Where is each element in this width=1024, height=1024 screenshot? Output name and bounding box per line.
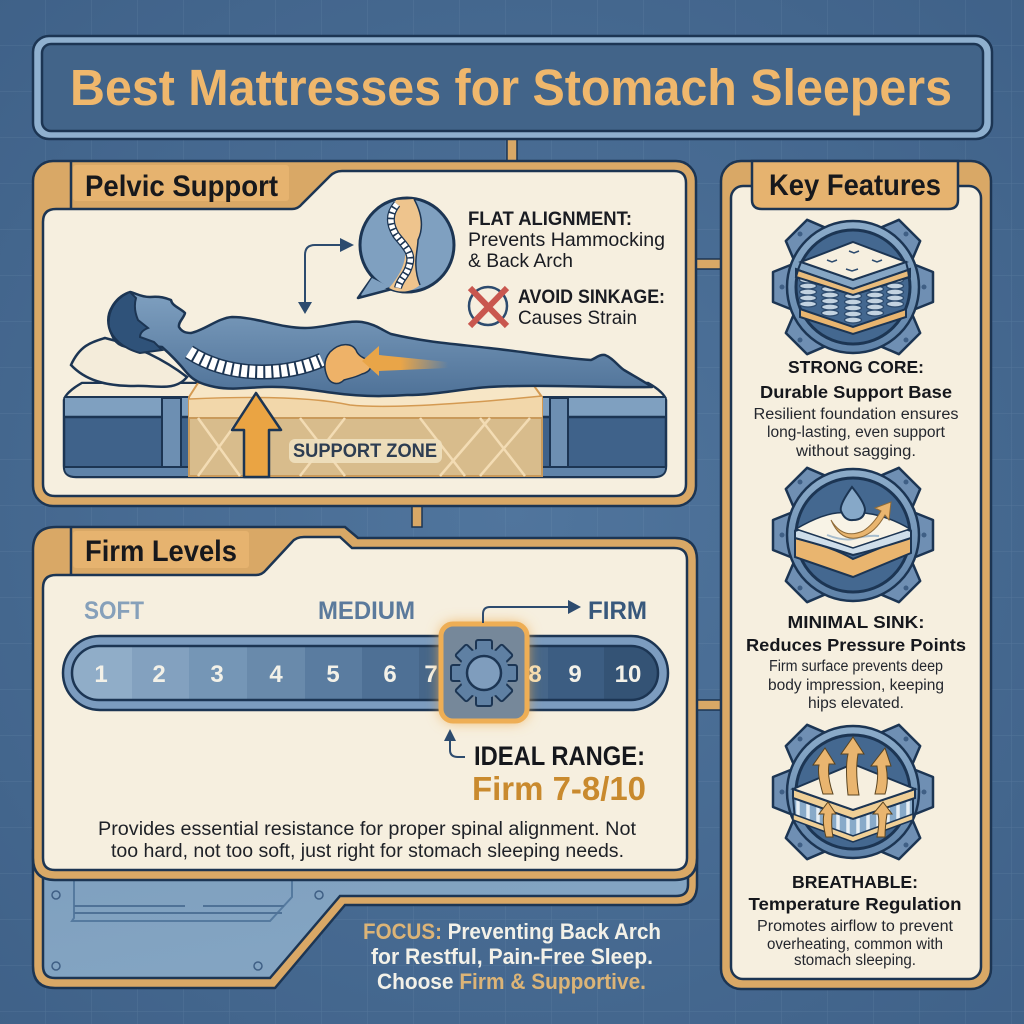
icon: strong core xyxy=(773,214,933,360)
connector stubs xyxy=(412,139,721,710)
text: minimal sink: hips elevated. xyxy=(808,695,904,712)
firmness scale bar: 1 xyxy=(94,661,108,688)
firmness scale bar: 6 xyxy=(383,661,397,688)
text: minimal sink: body impression, keeping xyxy=(768,677,944,694)
firmness scale bar: 5 xyxy=(326,661,340,688)
heading: pelvic support: Pelvic Support xyxy=(85,170,278,203)
scale labels: FIRM xyxy=(588,597,647,625)
firmness scale bar: 9 xyxy=(568,661,582,688)
tab: key features: Key Features xyxy=(769,169,941,202)
scale labels: SOFT xyxy=(84,597,144,625)
text: description: Provides essential resistance for proper spinal alignment. Not xyxy=(98,819,637,840)
text: breathable: stomach sleeping. xyxy=(794,952,916,969)
text: flat alignment xyxy=(468,208,665,272)
panel: pelvic support xyxy=(33,161,696,506)
firmness scale bar xyxy=(63,636,668,710)
firmness scale bar: 4 xyxy=(269,661,283,688)
text: breathable: Promotes airflow to prevent xyxy=(757,918,954,935)
text: ideal range: Firm 7-8/10 xyxy=(472,770,646,807)
arrow: upward support xyxy=(232,393,281,477)
scale labels: MEDIUM xyxy=(318,597,415,625)
text: description xyxy=(98,819,637,862)
focus message xyxy=(363,919,661,994)
text: minimal sink: Firm surface prevents deep xyxy=(769,658,943,675)
mattress xyxy=(64,383,666,477)
text: breathable xyxy=(748,872,962,969)
figure: sleeper body xyxy=(108,292,652,396)
text: flat alignment: FLAT ALIGNMENT: xyxy=(468,208,632,230)
pillow xyxy=(71,338,187,387)
support zone xyxy=(189,383,542,476)
focus message: FOCUS: Preventing Back Arch xyxy=(363,919,661,944)
icon: gear selector xyxy=(441,624,527,721)
text: avoid sinkage xyxy=(518,286,665,329)
scale labels xyxy=(84,597,647,625)
text: description: too hard, not too soft, just right for stomach sleeping needs. xyxy=(111,841,624,862)
text: breathable: overheating, common with xyxy=(767,936,943,953)
firmness scale bar: 10 xyxy=(615,661,641,688)
firmness scale bar: 2 xyxy=(152,661,166,688)
title: Best Mattresses for Stomach Sleepers xyxy=(70,59,952,116)
arrow: to firm xyxy=(483,600,581,623)
icon: minimal sink xyxy=(773,462,933,608)
icon: spine callout xyxy=(358,198,454,298)
text: avoid sinkage: Causes Strain xyxy=(518,307,637,329)
panel: key features xyxy=(721,161,991,989)
bottom plate xyxy=(33,850,697,988)
text: minimal sink xyxy=(746,612,966,712)
icon: breathable xyxy=(773,719,933,865)
icon: avoid cross xyxy=(469,287,507,326)
panel: firm levels xyxy=(33,527,697,880)
arrow: callout pointer xyxy=(298,238,354,314)
text: minimal sink: MINIMAL SINK: xyxy=(788,612,924,632)
text: breathable: Temperature Regulation xyxy=(748,894,962,914)
text: strong core: Durable Support Base xyxy=(760,382,952,402)
title banner xyxy=(33,36,992,139)
text: avoid sinkage: AVOID SINKAGE: xyxy=(518,286,665,308)
text: strong core xyxy=(754,357,959,460)
spine xyxy=(189,352,322,372)
text: strong core: STRONG CORE: xyxy=(788,357,924,377)
text: minimal sink: Reduces Pressure Points xyxy=(746,635,966,655)
arrow: pressure to hip xyxy=(362,346,448,376)
text: strong core: long-lasting, even support xyxy=(767,424,946,441)
text: flat alignment: & Back Arch xyxy=(468,250,573,272)
heading: firm levels: Firm Levels xyxy=(85,535,237,568)
arrow: ideal range pointer xyxy=(444,729,465,757)
hip bone xyxy=(325,345,371,383)
text: breathable: BREATHABLE: xyxy=(792,872,918,892)
hair xyxy=(109,292,162,353)
tab: key features xyxy=(752,161,958,209)
label: support zone: SUPPORT ZONE xyxy=(293,441,437,462)
number: 8: 8 xyxy=(528,661,542,688)
text: strong core: Resilient foundation ensures xyxy=(754,406,959,423)
focus message: Choose Firm & Supportive. xyxy=(377,969,646,994)
text: ideal range: IDEAL RANGE: xyxy=(474,741,645,771)
text: flat alignment: Prevents Hammocking xyxy=(468,229,665,251)
focus message: for Restful, Pain-Free Sleep. xyxy=(371,944,653,969)
text: strong core: without sagging. xyxy=(795,443,916,460)
text: ideal range xyxy=(472,741,646,807)
firmness scale bar: 7 xyxy=(424,661,438,688)
firmness scale bar: 3 xyxy=(210,661,224,688)
